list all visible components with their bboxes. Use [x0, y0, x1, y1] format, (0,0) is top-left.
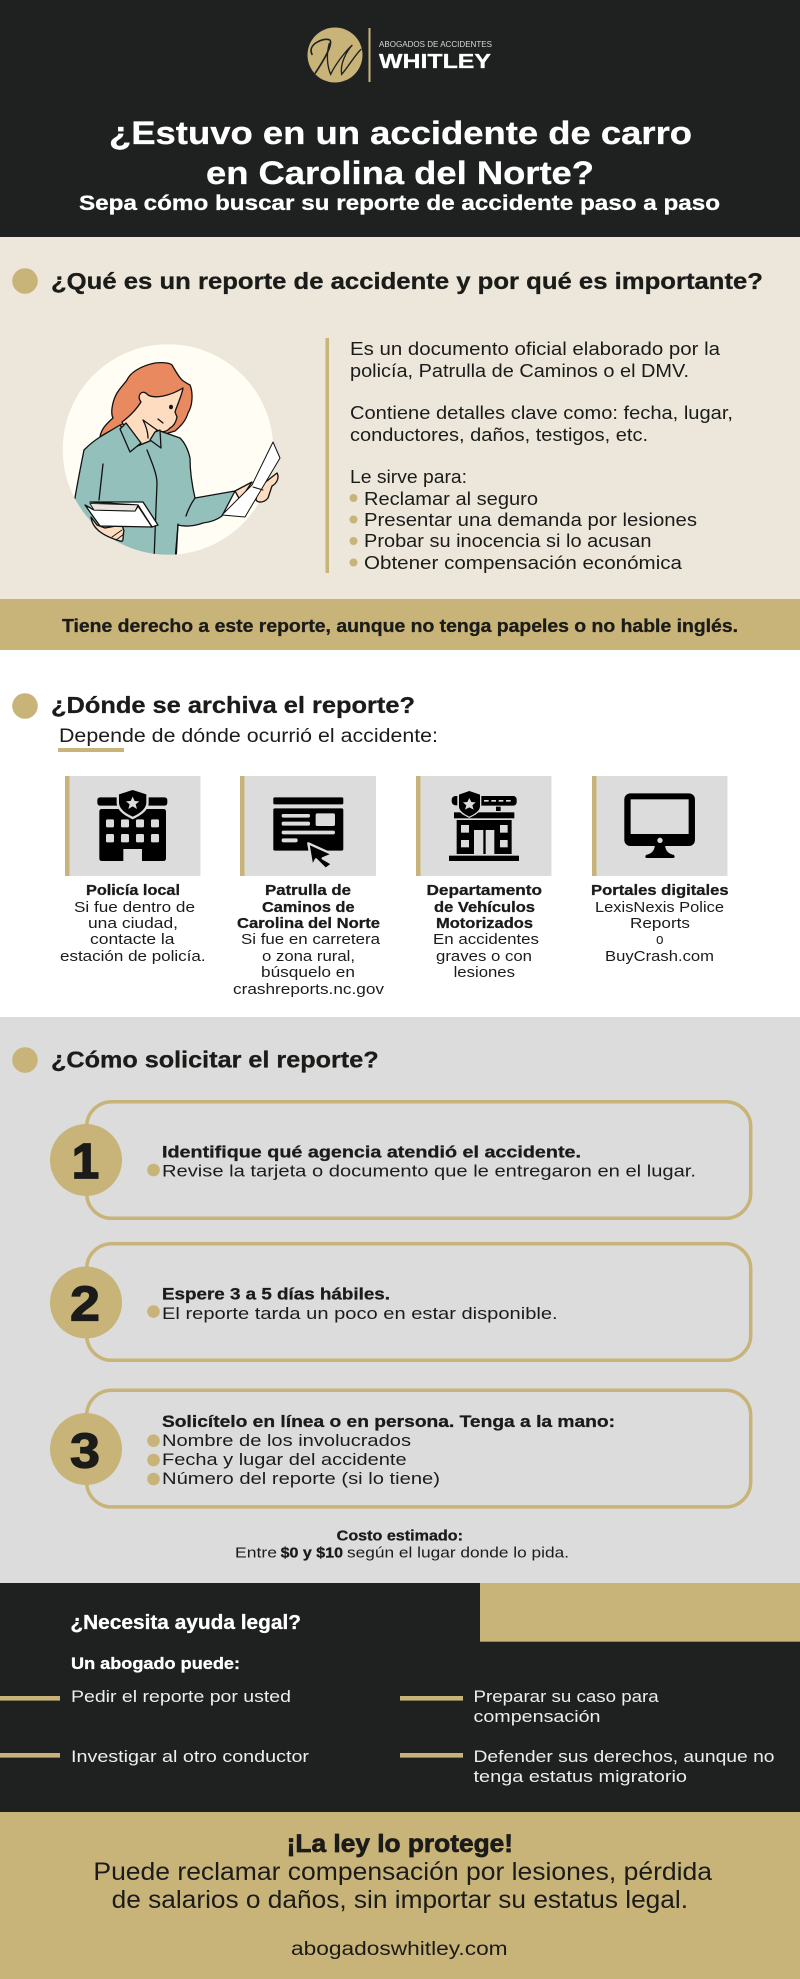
- card text: policía local: una ciudad,: [88, 915, 178, 932]
- card text: portales digitales: [591, 882, 729, 965]
- card text: patrulla de caminos: Carolina del Norte: [237, 915, 380, 932]
- text block: definición: [350, 339, 733, 573]
- title: ¿Estuvo en un accidente de carro: [109, 115, 692, 151]
- card text: patrulla de caminos: crashreports.nc.gov: [233, 981, 385, 998]
- text block: definición: Reclamar al seguro: [364, 489, 538, 509]
- website: abogadoswhitley.com: [291, 1939, 508, 1960]
- heading: necesita ayuda legal: ¿Necesita ayuda legal?: [70, 1612, 301, 1634]
- card text: departamento de vehículos: lesiones: [454, 964, 515, 981]
- card: policía local: [60, 776, 206, 965]
- list item: investigar: [0, 1747, 309, 1766]
- list item: preparar su caso: compensación: [474, 1707, 600, 1726]
- card text: departamento de vehículos: [426, 882, 542, 981]
- icon: police building: [97, 788, 167, 861]
- logo: Abogados Whitley: ABOGADOS DE ACCIDENTES: [379, 39, 492, 49]
- card: departamento de vehículos: [416, 776, 552, 981]
- text block: costo estimado: $0 y $10: [281, 1546, 343, 1562]
- list item: defender derechos: Defender sus derechos, aunque no: [474, 1747, 774, 1766]
- panel: ayuda legal: [0, 1583, 800, 1812]
- heading: cómo solicitar: ¿Cómo solicitar el reporte?: [51, 1046, 379, 1072]
- card text: portales digitales: Portales digitales: [591, 882, 729, 899]
- banner: derecho al reporte: Tiene derecho a este reporte, aunque no tenga papeles o no hable inglés.: [62, 616, 738, 636]
- card text: policía local: contacte la: [90, 931, 175, 948]
- card text: departamento de vehículos: de Vehículos: [434, 899, 535, 916]
- icon: web form with cursor: [273, 797, 343, 869]
- step 3: Nombre de los involucrados: [162, 1431, 411, 1450]
- list item: preparar su caso: [400, 1687, 659, 1726]
- card text: departamento de vehículos: Departamento: [426, 882, 542, 899]
- card text: policía local: Policía local: [86, 882, 180, 899]
- panel: la ley lo protege: [0, 1812, 800, 1979]
- panel: qué es un reporte: [0, 237, 800, 599]
- title: [109, 115, 692, 191]
- card text: policía local: estación de policía.: [60, 948, 206, 965]
- text block: costo estimado: [235, 1529, 569, 1562]
- card text: portales digitales: BuyCrash.com: [605, 948, 714, 965]
- decorative gold block: [480, 1583, 800, 1642]
- panel: dónde se archiva: [0, 650, 800, 1017]
- step 1: [50, 1102, 751, 1218]
- card text: departamento de vehículos: graves o con: [436, 948, 532, 965]
- text block: definición: policía, Patrulla de Caminos o el DMV.: [350, 361, 689, 381]
- step 3: 3: [70, 1424, 100, 1478]
- text block: costo estimado: según el lugar donde lo pida.: [347, 1546, 569, 1562]
- text block: compensación: Puede reclamar compensación por lesiones, pérdida: [93, 1858, 712, 1886]
- list item: pedir el reporte: [0, 1687, 291, 1706]
- text block: costo estimado: Costo estimado:: [337, 1529, 463, 1545]
- list item: preparar su caso: Preparar su caso para: [474, 1687, 659, 1706]
- subheading: un abogado puede: Un abogado puede:: [71, 1654, 240, 1673]
- card text: policía local: Si fue dentro de: [74, 899, 195, 916]
- card text: portales digitales: Reports: [630, 915, 690, 932]
- text block: definición: Contiene detalles clave como: fecha, lugar,: [350, 403, 733, 423]
- list item: defender derechos: tenga estatus migratorio: [474, 1767, 687, 1786]
- vertical divider: [326, 338, 329, 573]
- banner: derecho al reporte: [0, 599, 800, 650]
- card text: patrulla de caminos: Si fue en carretera: [241, 931, 381, 948]
- text block: costo estimado: Entre: [235, 1546, 277, 1562]
- card text: portales digitales: o: [656, 931, 664, 948]
- logo: Abogados Whitley: [308, 28, 492, 82]
- panel: header: [0, 0, 800, 237]
- card text: patrulla de caminos: Caminos de: [262, 899, 355, 916]
- card text: patrulla de caminos: o zona rural,: [262, 948, 355, 965]
- card text: patrulla de caminos: Patrulla de: [265, 882, 351, 899]
- step 3: Número del reporte (si lo tiene): [162, 1469, 440, 1488]
- card text: portales digitales: LexisNexis Police: [595, 899, 724, 916]
- text block: definición: Probar su inocencia si lo acusan: [364, 531, 652, 551]
- step 3: [50, 1390, 751, 1507]
- text block: compensación: de salarios o daños, sin importar su estatus legal.: [112, 1886, 688, 1914]
- step 3: Solicítelo en línea o en persona. Tenga a la mano:: [162, 1412, 615, 1431]
- text block: definición: conductores, daños, testigos, etc.: [350, 425, 648, 445]
- step 2: Espere 3 a 5 días hábiles.: [162, 1285, 390, 1304]
- icon: DMV station: [449, 790, 519, 861]
- step 1: 1: [72, 1135, 99, 1189]
- panel: cómo solicitar: [0, 1017, 800, 1583]
- card: portales digitales: [591, 776, 729, 965]
- text block: definición: Le sirve para:: [350, 467, 467, 487]
- step 3: Fecha y lugar del accidente: [162, 1450, 407, 1469]
- step 2: El reporte tarda un poco en estar disponible.: [162, 1304, 558, 1323]
- text block: definición: Es un documento oficial elaborado por la: [350, 339, 721, 359]
- subtitle: Sepa cómo buscar su reporte de accidente paso a paso: [79, 192, 720, 215]
- card: patrulla de caminos: [233, 776, 385, 998]
- subheading with underline: Depende de dónde ocurrió el accidente:: [59, 726, 438, 747]
- text block: compensación: [93, 1858, 712, 1914]
- title: en Carolina del Norte?: [206, 155, 594, 191]
- text block: definición: Presentar una demanda por lesiones: [364, 510, 697, 530]
- icon: computer monitor: [624, 793, 695, 858]
- list item: investigar: Investigar al otro conductor: [71, 1747, 309, 1766]
- heading: la ley lo protege: ¡La ley lo protege!: [287, 1830, 513, 1858]
- text block: definición: Obtener compensación económica: [364, 553, 683, 573]
- step 2: 2: [70, 1278, 100, 1332]
- step 1: Revise la tarjeta o documento que le entregaron en el lugar.: [162, 1161, 696, 1180]
- heading: qué es un reporte: ¿Qué es un reporte de accidente y por qué es importante?: [51, 268, 763, 294]
- illustration: woman reading report: [63, 344, 280, 560]
- list item: pedir el reporte: Pedir el reporte por usted: [71, 1687, 291, 1706]
- card text: policía local: [60, 882, 206, 965]
- card text: patrulla de caminos: [233, 882, 385, 998]
- card text: departamento de vehículos: Motorizados: [436, 915, 533, 932]
- list item: defender derechos: [400, 1747, 774, 1786]
- step 1: Identifique qué agencia atendió el accidente.: [162, 1142, 581, 1162]
- card text: departamento de vehículos: En accidentes: [433, 931, 539, 948]
- logo: Abogados Whitley: WHITLEY: [379, 50, 491, 73]
- step 2: [50, 1244, 751, 1360]
- card text: patrulla de caminos: búsquelo en: [261, 964, 355, 981]
- heading: dónde se archiva: ¿Dónde se archiva el reporte?: [51, 692, 415, 718]
